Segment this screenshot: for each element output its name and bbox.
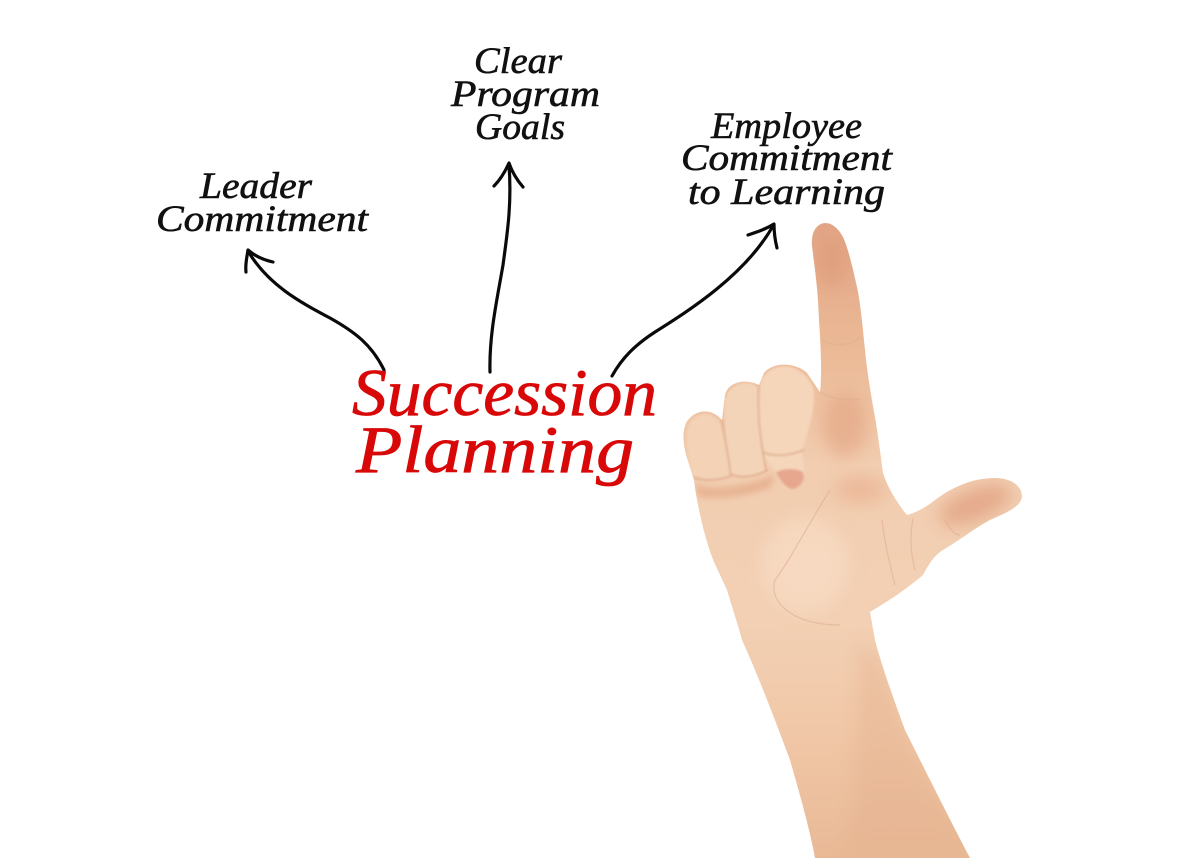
label: Clear Program Goals: Goals	[475, 107, 565, 148]
arrow: to Clear Program Goals	[490, 163, 523, 372]
palm lines	[773, 392, 960, 626]
label: Leader Commitment: Commitment	[156, 199, 370, 240]
arrow: to Leader Commitment	[246, 250, 384, 370]
title: Succession Planning: Succession	[352, 356, 657, 430]
arrow: to Employee Commitment	[612, 224, 777, 376]
label: Employee Commitment to Learning: Commitment	[681, 138, 894, 179]
label: Clear Program Goals	[450, 41, 600, 148]
title: Succession Planning	[352, 356, 657, 487]
hand illustration	[683, 223, 1022, 858]
shading: fingertip and palm creases	[695, 236, 1016, 858]
label: Clear Program Goals: Program	[450, 74, 600, 115]
label: Employee Commitment to Learning: to Learning	[688, 172, 885, 213]
title: Succession Planning: Planning	[355, 413, 634, 487]
label: Clear Program Goals: Clear	[474, 41, 563, 82]
label: Leader Commitment: Leader	[199, 166, 313, 207]
curled fingers	[687, 366, 814, 489]
label: Employee Commitment to Learning: Employee	[710, 106, 862, 147]
label: Leader Commitment	[156, 166, 370, 240]
label: Employee Commitment to Learning	[681, 106, 894, 213]
